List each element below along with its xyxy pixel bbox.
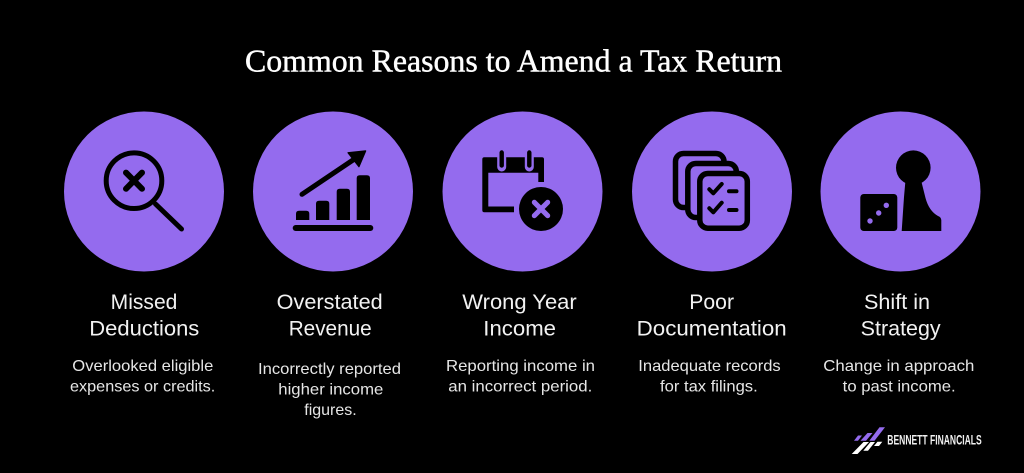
- icon circle: shift in strategy: [820, 112, 980, 272]
- panel: missed deductions: [64, 112, 224, 396]
- description: poor documentation: [638, 358, 781, 396]
- heading: missed deductions: [89, 291, 199, 341]
- heading: wrong year income: Income: [483, 318, 556, 341]
- description: overstated revenue: Incorrectly reported: [258, 361, 401, 378]
- description: overstated revenue: higher income: [278, 382, 383, 398]
- icon circle: missed deductions: [64, 112, 224, 272]
- heading: shift in strategy: Shift in: [864, 291, 930, 314]
- description: wrong year income: an incorrect period.: [448, 378, 592, 396]
- icon: dice and pawn: [860, 150, 941, 231]
- heading: poor documentation: Documentation: [637, 318, 787, 341]
- description: overstated revenue: [258, 361, 401, 419]
- icon circle: overstated revenue: [253, 112, 413, 272]
- icon: magnifier with x: [106, 153, 182, 229]
- icon: rising bar chart with arrow: [293, 151, 373, 231]
- description: poor documentation: for tax filings.: [660, 378, 758, 396]
- panel: wrong year income: [442, 112, 602, 396]
- description: overstated revenue: figures.: [304, 402, 357, 419]
- description: missed deductions: expenses or credits.: [70, 378, 215, 396]
- heading: overstated revenue: Overstated: [277, 291, 383, 314]
- description: shift in strategy: to past income.: [843, 378, 956, 396]
- description: shift in strategy: Change in approach: [823, 358, 974, 375]
- description: wrong year income: Reporting income in: [446, 358, 595, 375]
- description: missed deductions: Overlooked eligible: [72, 358, 213, 375]
- heading: missed deductions: Missed: [111, 291, 177, 314]
- heading: overstated revenue: [277, 291, 383, 341]
- icon: stacked checklists: [676, 154, 747, 228]
- heading: overstated revenue: Revenue: [289, 318, 372, 341]
- description: wrong year income: [446, 358, 595, 396]
- heading: poor documentation: [637, 291, 787, 341]
- logo mark: [852, 427, 885, 454]
- description: missed deductions: [70, 358, 215, 396]
- title: Common Reasons to Amend a Tax Return: [245, 42, 782, 78]
- panel: poor documentation: [632, 112, 792, 396]
- logo: bennett financials: [852, 427, 982, 454]
- icon circle: wrong year income: [442, 112, 602, 272]
- icon: calendar with x badge: [482, 152, 563, 231]
- description: shift in strategy: [823, 358, 974, 396]
- icon circle: poor documentation: [632, 112, 792, 272]
- heading: wrong year income: [462, 291, 577, 341]
- heading: poor documentation: Poor: [689, 291, 734, 314]
- heading: shift in strategy: [861, 291, 941, 341]
- heading: wrong year income: Wrong Year: [462, 291, 577, 314]
- heading: shift in strategy: Strategy: [861, 318, 941, 341]
- heading: missed deductions: Deductions: [89, 318, 199, 341]
- description: poor documentation: Inadequate records: [638, 358, 781, 375]
- panel: overstated revenue: [253, 112, 413, 419]
- panel: shift in strategy: [820, 112, 980, 396]
